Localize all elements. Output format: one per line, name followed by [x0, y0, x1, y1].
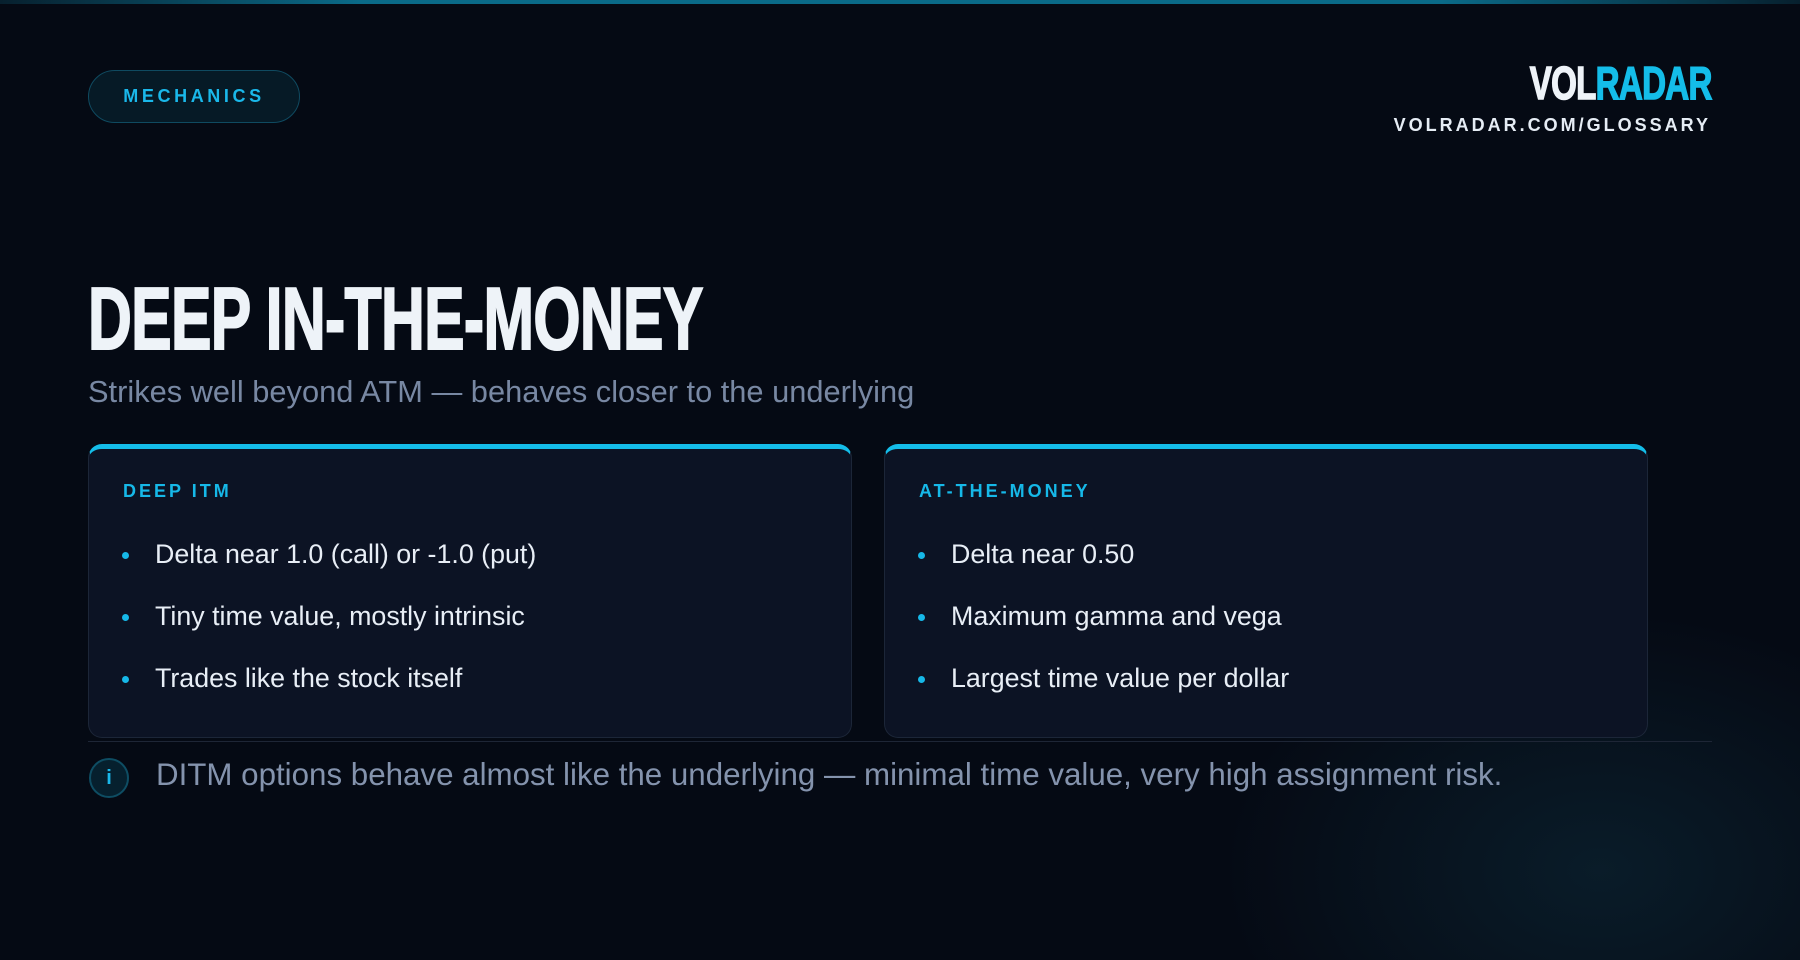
bullet: Largest time value per dollar: [951, 663, 1289, 693]
brand logo: VOLRADAR: [1530, 57, 1712, 109]
title: DEEP IN-THE-MONEY: [88, 269, 703, 368]
panel label: DEEP ITM: [123, 481, 232, 501]
category pill: [88, 70, 300, 123]
bullet: Delta near 1.0 (call) or -1.0 (put): [155, 539, 536, 569]
category pill: MECHANICS: [123, 86, 265, 106]
bullet: Trades like the stock itself: [155, 663, 462, 693]
icon: info: i: [106, 766, 112, 788]
panel: deep itm: [88, 444, 852, 738]
panel label: AT-THE-MONEY: [919, 481, 1091, 501]
panel: at-the-money: [884, 444, 1648, 738]
callout note: DITM options behave almost like the underlying — minimal time value, very high assignment risk.: [156, 757, 1502, 792]
bullet: Tiny time value, mostly intrinsic: [155, 601, 525, 631]
brand url: VOLRADAR.COM/GLOSSARY: [1394, 115, 1711, 135]
icon: info: [89, 758, 129, 798]
bullet: Delta near 0.50: [951, 539, 1134, 569]
bullet: Maximum gamma and vega: [951, 601, 1282, 631]
subtitle: Strikes well beyond ATM — behaves closer to the underlying: [88, 374, 914, 409]
